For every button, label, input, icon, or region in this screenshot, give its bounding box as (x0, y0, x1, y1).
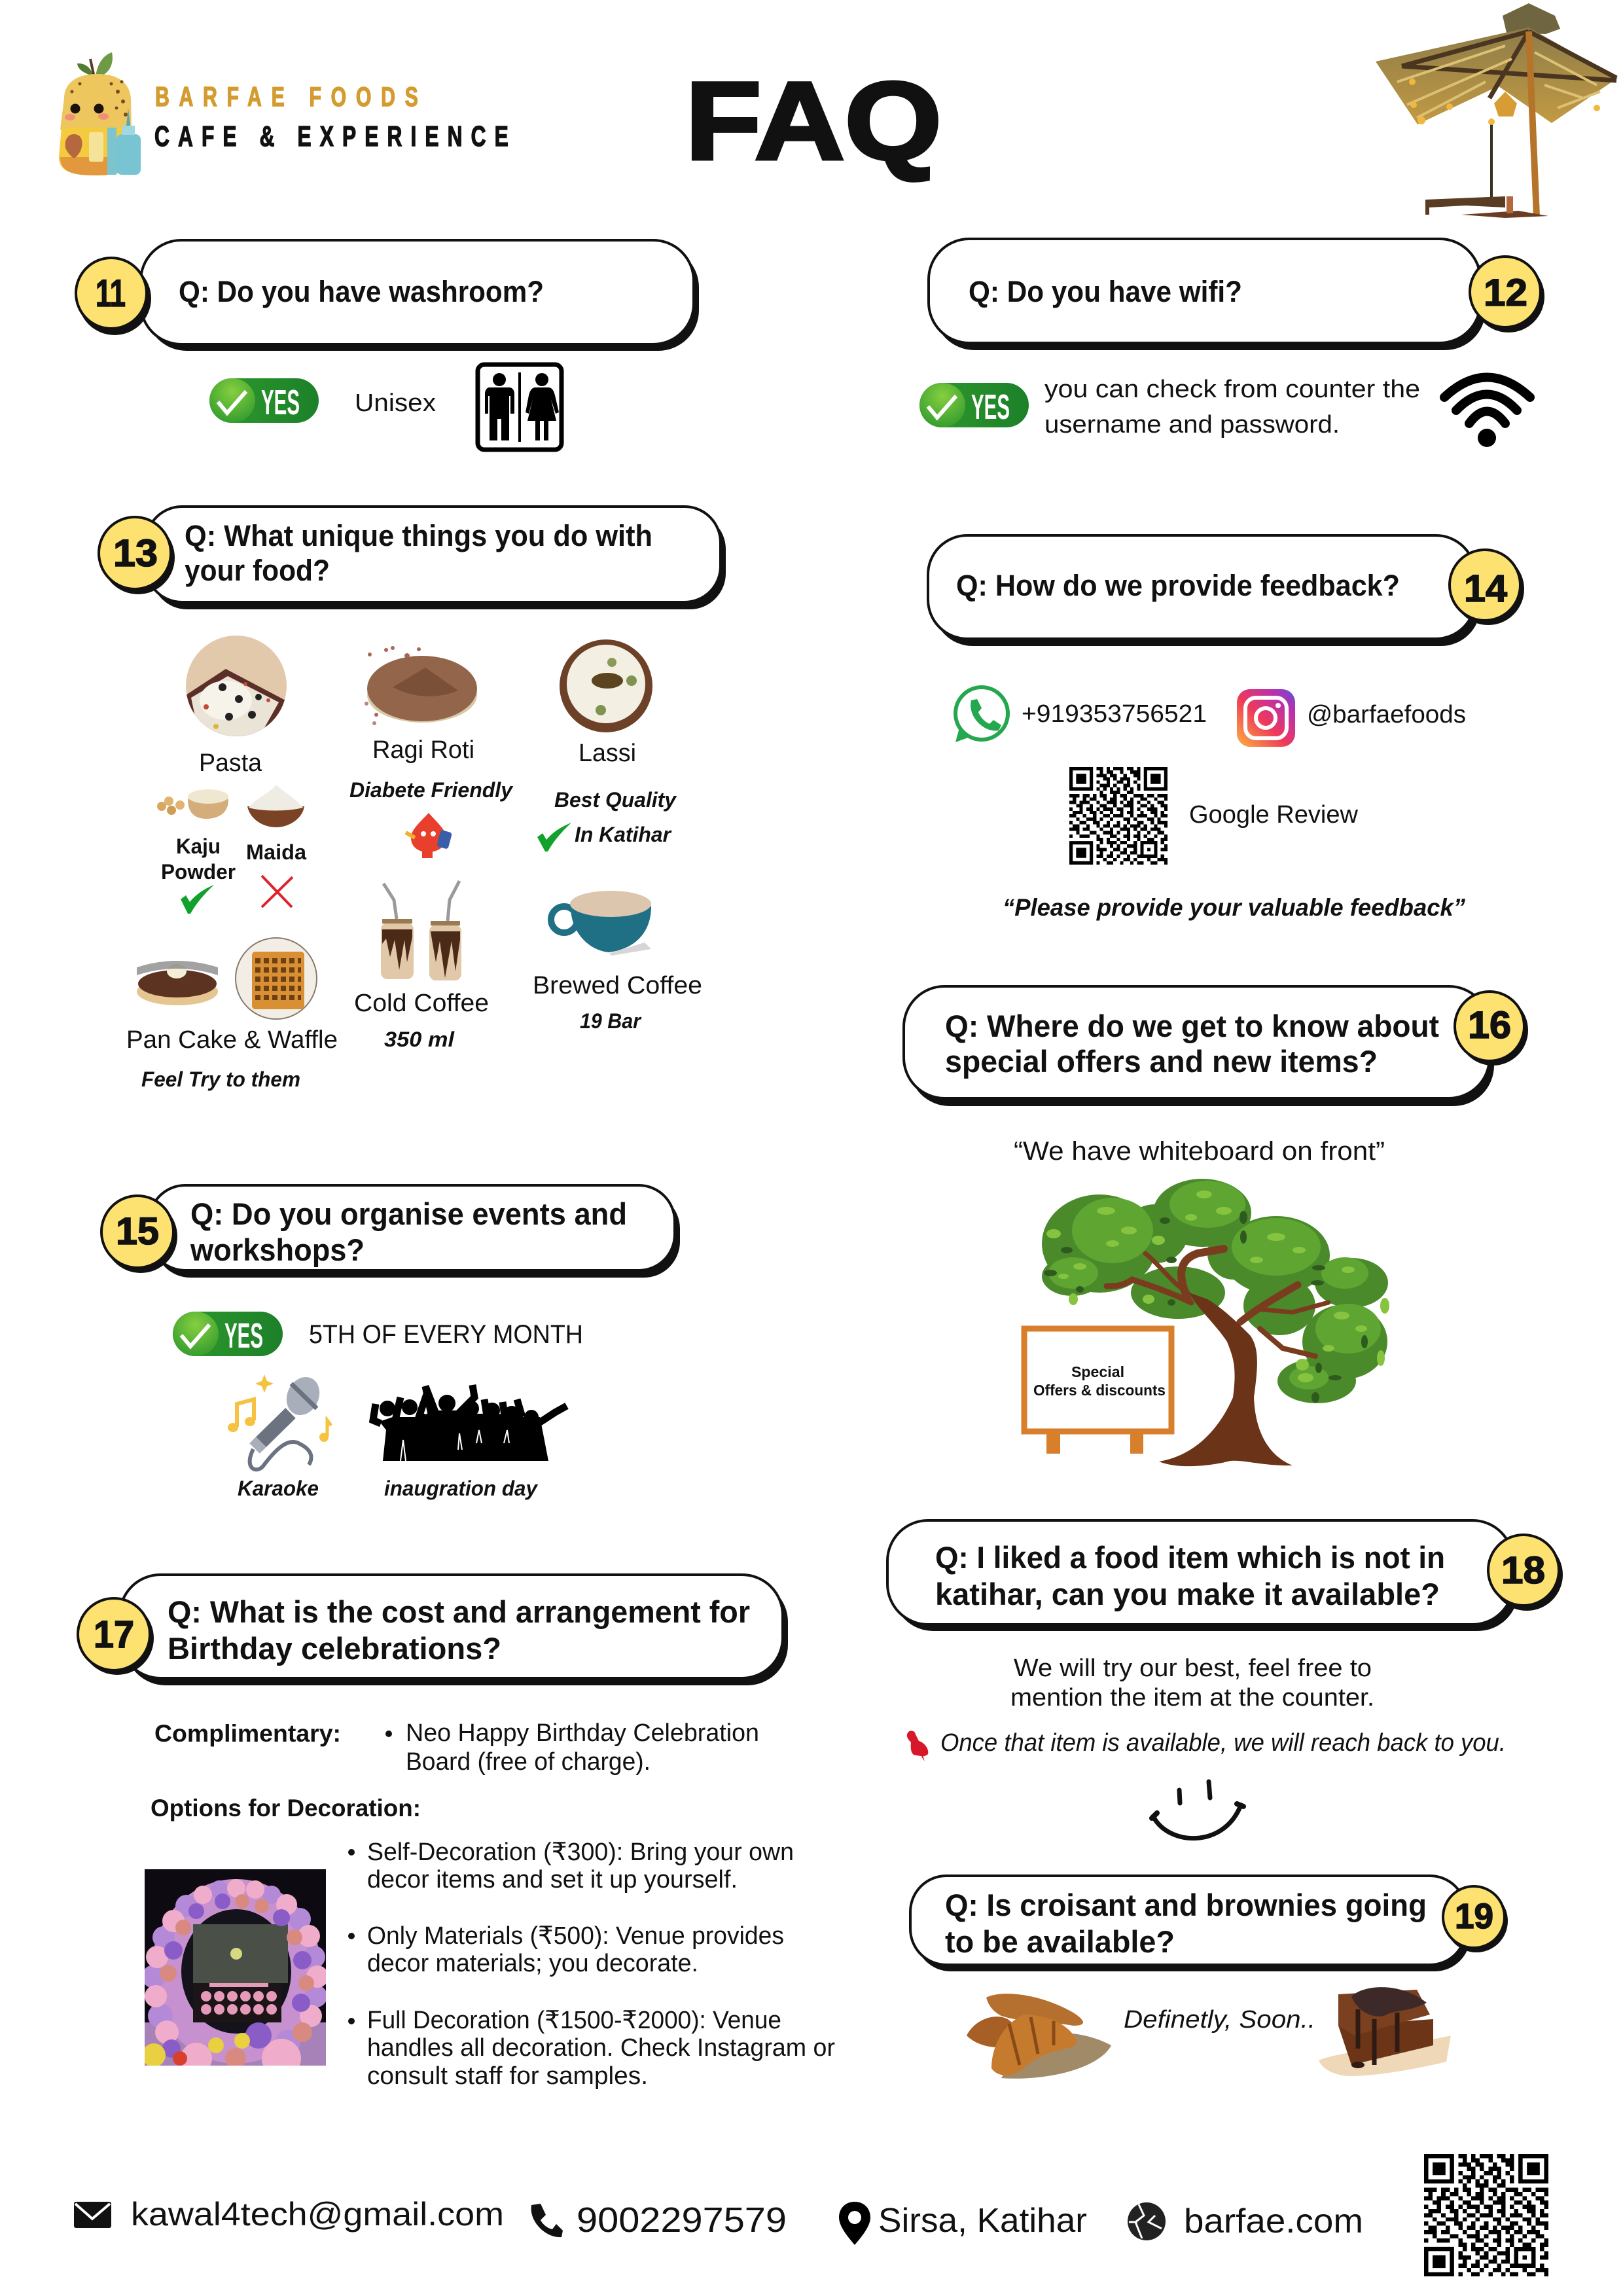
illustration: offers board: Offers & discounts (1033, 1382, 1166, 1399)
number badge (1488, 1535, 1563, 1611)
decoration option: self: Self-Decoration (₹300): Bring your own (367, 1839, 794, 1866)
decoration option: materials: decor materials; you decorate. (367, 1950, 698, 1977)
decoration option: full: handles all decoration. Check Instagram or (367, 2034, 835, 2062)
answer text: username and password. (1044, 411, 1340, 439)
illustration: offers board (1024, 1329, 1171, 1454)
icon: red cross (262, 876, 293, 907)
number badge: 17 (94, 1613, 134, 1656)
question text (168, 1594, 750, 1666)
panel: question 13 (99, 507, 726, 1091)
decoration option: self: decor items and set it up yourself. (367, 1866, 738, 1893)
note: 350 ml: 350 ml (384, 1028, 455, 1051)
image: brewed coffee cup (551, 891, 651, 956)
decoration option: self (348, 1839, 794, 1893)
question text: Q: I liked a food item which is not in (935, 1540, 1445, 1575)
number badge (101, 1196, 177, 1273)
icon: globe (1128, 2202, 1166, 2240)
yes badge: YES (971, 387, 1010, 427)
label: kaju powder (161, 834, 236, 884)
icon: green check (181, 885, 214, 914)
answer text: Definetly, Soon.. (1124, 2006, 1315, 2034)
panel: question 12 (919, 239, 1544, 447)
question text: Q: What is the cost and arrangement for (168, 1594, 750, 1629)
question bubble (904, 986, 1494, 1106)
image: croissant (967, 1994, 1111, 2079)
label: cold coffee: Cold Coffee (354, 990, 489, 1017)
question text (190, 1196, 627, 1267)
number badge (1470, 257, 1544, 332)
title: FAQ (685, 59, 942, 183)
label: pasta: Pasta (199, 749, 262, 777)
question text: Q: Do you have washroom? (179, 275, 544, 308)
number badge: 13 (113, 532, 158, 575)
number badge: 12 (1484, 272, 1527, 314)
label: inauguration day: inaugration day (384, 1477, 539, 1500)
label: lassi: Lassi (579, 740, 636, 767)
question text: workshops? (190, 1232, 365, 1267)
label: maida: Maida (246, 840, 306, 864)
label: kaju powder: Kaju (176, 834, 221, 858)
icon: red pin (907, 1731, 928, 1761)
question text (935, 1540, 1445, 1611)
panel: question 16 (904, 986, 1528, 1466)
question bubble (929, 239, 1486, 350)
instagram handle: @barfaefoods (1307, 701, 1466, 728)
question text: Q: Where do we get to know about (945, 1009, 1439, 1043)
number badge (76, 258, 151, 335)
italic note: Once that item is available, we will reach back to you. (940, 1729, 1506, 1757)
icon: crowd silhouette (373, 1385, 567, 1461)
note: in katihar: In Katihar (575, 823, 672, 846)
icon: blood drop mascot (406, 813, 452, 858)
icon: whatsapp (955, 687, 1008, 742)
image: pancake (137, 961, 218, 1005)
complimentary label: Complimentary: (154, 1720, 341, 1747)
icon: karaoke microphone (228, 1372, 331, 1469)
answer text: We will try our best, feel free to (1014, 1655, 1372, 1682)
panel: question 15 (101, 1185, 680, 1500)
footer contact bar (74, 2154, 1548, 2276)
yes badge (919, 383, 1029, 427)
number badge (1443, 1886, 1508, 1952)
image: waffle (236, 938, 317, 1019)
question bubble (149, 1185, 680, 1278)
answer text: mention the item at the counter. (1010, 1684, 1374, 1712)
website: barfae.com (1184, 2202, 1363, 2240)
question bubble (146, 507, 726, 609)
google review label: Google Review (1189, 801, 1359, 829)
question text: Q: Do you have wifi? (969, 275, 1242, 308)
image: lassi (560, 639, 652, 732)
number badge (1455, 992, 1528, 1066)
decoration option: materials (348, 1922, 784, 1977)
decoration option: full (348, 2007, 835, 2090)
decoration option: full: consult staff for samples. (367, 2062, 648, 2090)
question text: your food? (185, 554, 330, 587)
question bubble (120, 1575, 788, 1685)
number badge: 19 (1455, 1897, 1493, 1936)
phone number: 9002297579 (577, 2200, 787, 2240)
decoration option: full: Full Decoration (₹1500-₹2000): Venue (367, 2007, 781, 2034)
question text (945, 1009, 1439, 1079)
number badge (78, 1598, 154, 1675)
feedback quote: “Please provide your valuable feedback” (1003, 894, 1465, 921)
label: pan cake and waffle: Pan Cake & Waffle (126, 1026, 338, 1054)
answer text: you can check from counter the (1044, 376, 1420, 403)
note: best quality: Best Quality (554, 788, 677, 812)
icon: instagram (1237, 689, 1295, 747)
panel: question 14 (928, 535, 1524, 921)
icon: wifi (1444, 377, 1530, 447)
yes badge: YES (261, 383, 300, 422)
icon: restroom sign (478, 365, 562, 450)
number badge: 18 (1501, 1549, 1545, 1592)
brand tagline: CAFE & EXPERIENCE (154, 120, 508, 152)
qr code: google review (1069, 767, 1168, 865)
icon: phone (531, 2204, 563, 2237)
number badge (99, 517, 175, 594)
icon: location pin (839, 2202, 870, 2245)
question text: Q: What unique things you do with (185, 519, 652, 552)
photo: balloon arch (142, 1869, 329, 2078)
yes badge: YES (224, 1316, 263, 1355)
brand name: BARFAE FOODS (155, 81, 418, 112)
image: brownie (1319, 1987, 1451, 2076)
image: cold coffee (381, 881, 461, 980)
label: ragi roti: Ragi Roti (372, 736, 474, 764)
logo: Barfae Foods (59, 52, 508, 175)
yes badge (209, 378, 319, 423)
label: brewed coffee: Brewed Coffee (533, 972, 702, 999)
image: cafe umbrella (1376, 3, 1618, 218)
question text: Birthday celebrations? (168, 1631, 501, 1666)
complimentary item (385, 1719, 759, 1776)
panel: question 19 (910, 1876, 1508, 2079)
note: feel try: Feel Try to them (141, 1067, 300, 1091)
complimentary item: Neo Happy Birthday Celebration (406, 1719, 759, 1747)
complimentary item: Board (free of charge). (406, 1748, 651, 1776)
note: 19 bar: 19 Bar (580, 1009, 641, 1033)
question text (945, 1888, 1427, 1959)
panel: question 17 (78, 1575, 835, 2090)
question text: Q: Do you organise events and (190, 1196, 627, 1231)
label: karaoke: Karaoke (238, 1477, 319, 1500)
icon: email (74, 2202, 111, 2228)
panel: question 11 (76, 240, 699, 450)
number badge (1450, 550, 1524, 625)
icon: fruit mascot (59, 52, 141, 175)
icon: green check (537, 823, 571, 852)
answer quote: “We have whiteboard on front” (1014, 1137, 1385, 1166)
whatsapp number: +919353756521 (1022, 700, 1207, 728)
answer text: 5TH OF EVERY MONTH (309, 1320, 583, 1349)
number badge: 11 (96, 272, 126, 315)
question bubble (141, 240, 699, 351)
number badge: 14 (1464, 567, 1507, 610)
image: kaju powder (157, 789, 228, 819)
yes badge (173, 1312, 283, 1356)
question bubble (910, 1876, 1471, 1971)
panel: question 18 (887, 1520, 1563, 1839)
question text: special offers and new items? (945, 1044, 1378, 1079)
number badge: 15 (116, 1210, 159, 1253)
question text: katihar, can you make it available? (935, 1577, 1440, 1611)
image: pasta (186, 635, 288, 738)
question text: to be available? (945, 1924, 1175, 1959)
answer text: Unisex (355, 389, 436, 417)
illustration: offers board: Special (1071, 1363, 1124, 1380)
answer text (1010, 1655, 1374, 1712)
image: maida bowl (247, 785, 304, 827)
illustration: tree (1042, 1179, 1389, 1466)
question bubble (887, 1520, 1518, 1631)
decoration option: materials: Only Materials (₹500): Venue provides (367, 1922, 784, 1950)
options heading: Options for Decoration: (151, 1795, 421, 1821)
icon: smiley (1152, 1782, 1243, 1839)
note: diabetes friendly: Diabete Friendly (349, 778, 514, 802)
location: Sirsa, Katihar (878, 2202, 1087, 2240)
question text: Q: Is croisant and brownies going (945, 1888, 1427, 1922)
email: kawal4tech@gmail.com (131, 2196, 504, 2233)
qr code: website (1424, 2154, 1548, 2276)
image: ragi roti (365, 646, 477, 725)
label: kaju powder: Powder (161, 860, 236, 884)
question bubble (928, 535, 1480, 646)
question text: Q: How do we provide feedback? (956, 569, 1400, 602)
number badge: 16 (1468, 1004, 1511, 1047)
answer text (1044, 376, 1420, 439)
question text (185, 519, 652, 587)
